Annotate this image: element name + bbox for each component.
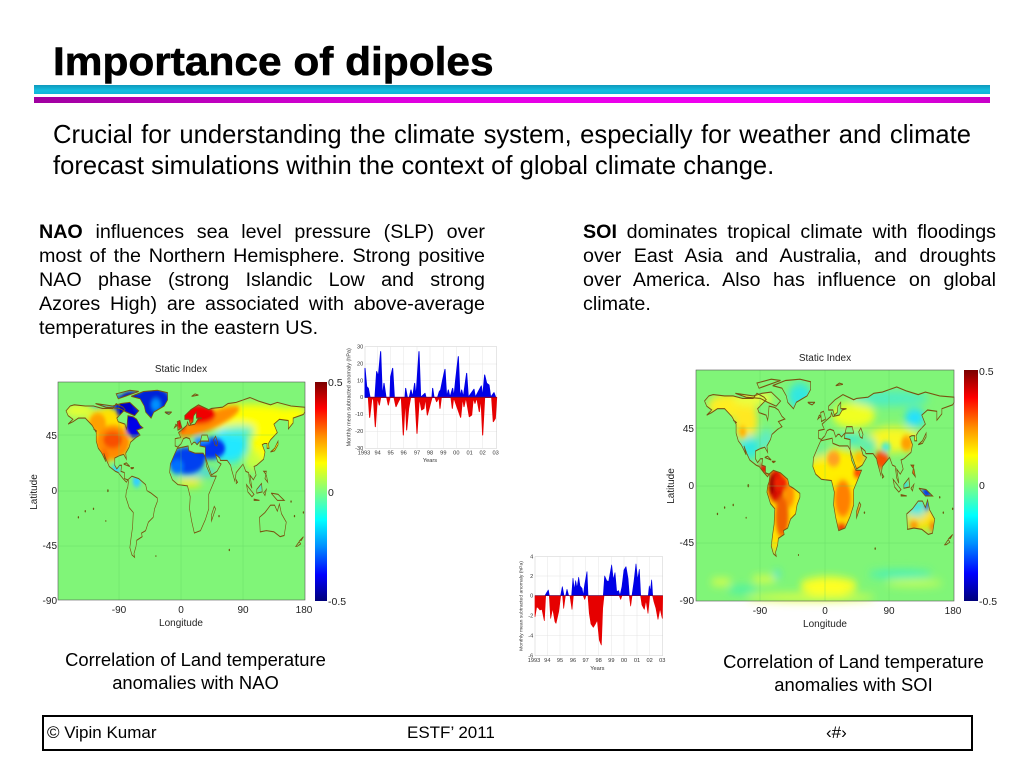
NAO description: most of the Northern Hemisphere. Strong positive <box>39 245 485 267</box>
positive anomalies <box>545 564 653 596</box>
SOI caption <box>723 651 984 694</box>
intro text: forecast simulations within the context of global climate change. <box>53 152 774 180</box>
colour bar <box>315 377 346 608</box>
axis labels: 10 <box>357 378 363 384</box>
SOI caption: Correlation of Land temperature <box>723 651 984 672</box>
colour bar: 0.5 <box>979 366 994 378</box>
footer: event: ESTF’ 2011 <box>407 723 495 742</box>
latitude axis labels <box>666 424 694 607</box>
NAO caption <box>65 649 326 692</box>
NAO correlation map <box>29 364 346 629</box>
axis labels: 00 <box>621 658 627 664</box>
longitude axis labels: 0 <box>822 606 828 617</box>
negative anomalies <box>535 596 663 645</box>
longitude axis labels: 180 <box>945 606 962 617</box>
axis labels: 30 <box>357 345 363 351</box>
axis labels: 00 <box>453 451 459 457</box>
latitude axis labels: 0 <box>51 486 57 497</box>
axis labels: -4 <box>528 633 533 639</box>
axis labels: Monthly mean subtracted anomaly (hPa) <box>346 348 352 446</box>
latitude axis labels: 0 <box>688 481 694 492</box>
longitude axis labels <box>112 605 313 629</box>
colour bar <box>964 366 997 608</box>
latitude axis labels: -90 <box>680 596 694 607</box>
SOI description: over America. Also has influence on global <box>583 269 996 291</box>
axis labels: 4 <box>530 555 533 561</box>
positive anomalies <box>365 352 496 397</box>
NAO description: temperatures in the eastern US. <box>39 317 318 339</box>
axis labels: 0 <box>530 594 533 600</box>
header rule: cyan <box>34 85 990 94</box>
map title: Static Index <box>799 353 851 364</box>
axis labels: 01 <box>467 451 473 457</box>
axis labels: 95 <box>557 658 563 664</box>
SOI description: over East Asia and Australia, and droughts <box>583 245 996 267</box>
footer: author: © Vipin Kumar <box>47 723 157 742</box>
axis labels: 03 <box>493 451 499 457</box>
intro text: Crucial for understanding the climate system, especially for weather and climate <box>53 121 971 149</box>
axis labels: 94 <box>375 451 381 457</box>
latitude axis labels <box>29 431 57 607</box>
axis labels: 02 <box>480 451 486 457</box>
negative anomalies <box>368 397 497 435</box>
SOI time series chart <box>519 555 665 672</box>
colour bar: 0 <box>328 487 334 499</box>
NAO description: Azores High) are associated with above-average <box>39 293 485 315</box>
map plot: SOI <box>696 370 954 601</box>
axis labels: 96 <box>401 451 407 457</box>
NAO description: NAO influences sea level pressure (SLP) over <box>39 221 485 243</box>
longitude axis labels: 180 <box>296 605 313 616</box>
longitude axis labels: -90 <box>112 605 127 616</box>
NAO description <box>39 221 485 339</box>
NAO time series chart <box>346 345 499 464</box>
footer: page number: ‹#› <box>826 723 847 742</box>
intro text <box>53 121 971 180</box>
axis labels: 1993 <box>528 658 540 664</box>
axis labels <box>519 555 665 672</box>
axis labels: 99 <box>440 451 446 457</box>
longitude axis labels: 90 <box>883 606 895 617</box>
axis labels: 01 <box>634 658 640 664</box>
longitude axis labels: 90 <box>237 605 249 616</box>
latitude axis labels: 45 <box>683 424 694 435</box>
longitude axis labels: Longitude <box>803 619 847 630</box>
axis labels: Monthly mean subtracted anomaly (hPa) <box>519 561 525 651</box>
map plot: NAO <box>58 382 307 600</box>
latitude axis labels: -45 <box>43 541 57 552</box>
axis labels: 94 <box>544 658 550 664</box>
latitude axis labels: Latitude <box>29 474 40 510</box>
longitude axis labels: 0 <box>178 605 184 616</box>
axis labels: 95 <box>388 451 394 457</box>
colour bar: 0 <box>979 480 985 492</box>
longitude axis labels <box>753 606 962 630</box>
header rule: magenta <box>34 97 990 103</box>
axis labels: Years <box>423 458 437 464</box>
longitude axis labels: Longitude <box>159 618 203 629</box>
axis labels: -2 <box>528 614 533 620</box>
axis labels: 02 <box>647 658 653 664</box>
axis labels: -20 <box>355 429 363 435</box>
colour bar: -0.5 <box>979 596 997 608</box>
colour bar: 0.5 <box>328 377 343 389</box>
map title: Static Index <box>155 364 207 375</box>
SOI caption: anomalies with SOI <box>774 674 933 694</box>
axis labels: -10 <box>355 412 363 418</box>
latitude axis labels: -45 <box>680 538 694 549</box>
latitude axis labels: -90 <box>43 596 57 607</box>
axis labels: Years <box>590 666 605 672</box>
axis labels: -30 <box>355 446 363 452</box>
latitude axis labels: 45 <box>46 431 57 442</box>
SOI correlation map <box>666 353 997 630</box>
axis labels: 0 <box>360 395 363 401</box>
SOI description: SOI dominates tropical climate with floodings <box>583 221 996 243</box>
axis labels: -6 <box>528 653 533 659</box>
latitude axis labels: Latitude <box>666 468 677 504</box>
axis labels: 97 <box>583 658 589 664</box>
axis labels: 98 <box>427 451 433 457</box>
axis labels: 03 <box>659 658 665 664</box>
axis labels: 1993 <box>358 451 370 457</box>
axis labels: 99 <box>608 658 614 664</box>
NAO caption: Correlation of Land temperature <box>65 649 326 670</box>
axis labels: 98 <box>596 658 602 664</box>
NAO description: NAO phase (strong Islandic Low and strong <box>39 269 485 291</box>
footer box <box>42 715 973 751</box>
longitude axis labels: -90 <box>753 606 768 617</box>
figures layer <box>30 344 997 670</box>
SOI description <box>583 221 996 315</box>
SOI description: climate. <box>583 293 651 315</box>
colour bar: -0.5 <box>328 596 346 608</box>
axis labels: 2 <box>530 574 533 580</box>
axis labels: 96 <box>570 658 576 664</box>
title: Importance of dipoles <box>53 40 494 84</box>
axis labels: 20 <box>357 362 363 368</box>
axis labels <box>346 345 499 464</box>
NAO caption: anomalies with NAO <box>112 672 279 692</box>
axis labels: 97 <box>414 451 420 457</box>
